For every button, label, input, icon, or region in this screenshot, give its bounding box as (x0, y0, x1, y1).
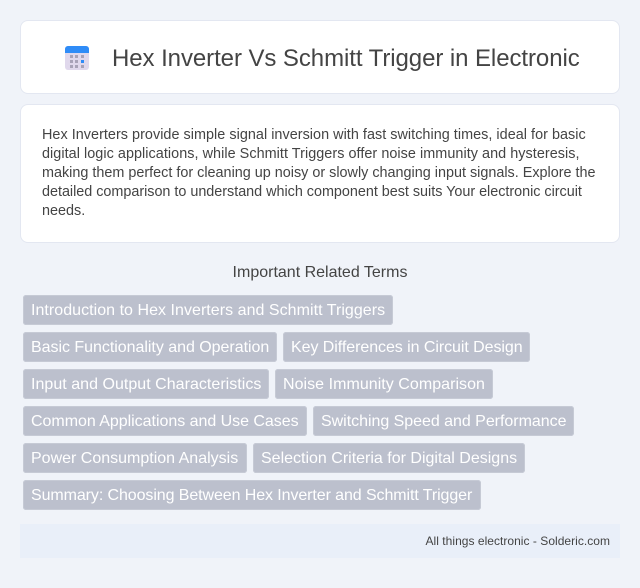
tag: Power Consumption Analysis (31, 450, 238, 467)
tag (23, 369, 269, 399)
footer credit: All things electronic - Solderic.com (426, 534, 610, 548)
tag: Input and Output Characteristics (31, 376, 261, 393)
tag (313, 406, 574, 436)
panel: description (20, 104, 620, 243)
text block: description: needs. (42, 203, 85, 219)
tag (23, 295, 393, 325)
tag (283, 332, 530, 362)
tag (253, 443, 525, 473)
tag: Selection Criteria for Digital Designs (261, 450, 517, 467)
panel: term tags (23, 295, 574, 510)
tag (23, 443, 247, 473)
tag (23, 406, 307, 436)
text block: description: making them perfect for cleaning up noisy or slowly changing input signals. Explore the (42, 165, 596, 181)
tag: Key Differences in Circuit Design (291, 339, 523, 356)
tag (275, 369, 493, 399)
heading: related terms: Important Related Terms (233, 264, 407, 281)
tag: Introduction to Hex Inverters and Schmitt Triggers (31, 302, 385, 319)
text block: description: Hex Inverters provide simple signal inversion with fast switching times, ideal for basic (42, 127, 586, 143)
tag: Common Applications and Use Cases (31, 413, 299, 430)
tag (23, 332, 277, 362)
icon: calendar grid (65, 46, 89, 70)
text block: description (42, 127, 596, 219)
text block: description: detailed comparison to understand which component best suits Your electronic circuit (42, 184, 582, 200)
text block: description: digital logic applications, while Schmitt Triggers offer noise immunity and hysteresis, (42, 146, 580, 162)
tag: Switching Speed and Performance (321, 413, 566, 430)
tag: Summary: Choosing Between Hex Inverter and Schmitt Trigger (31, 487, 472, 504)
tag (23, 480, 481, 510)
title: Hex Inverter Vs Schmitt Trigger in Electronic (112, 45, 580, 72)
tag: Basic Functionality and Operation (31, 339, 269, 356)
tag: Noise Immunity Comparison (283, 376, 485, 393)
panel: header (20, 20, 620, 94)
footer (20, 524, 620, 558)
